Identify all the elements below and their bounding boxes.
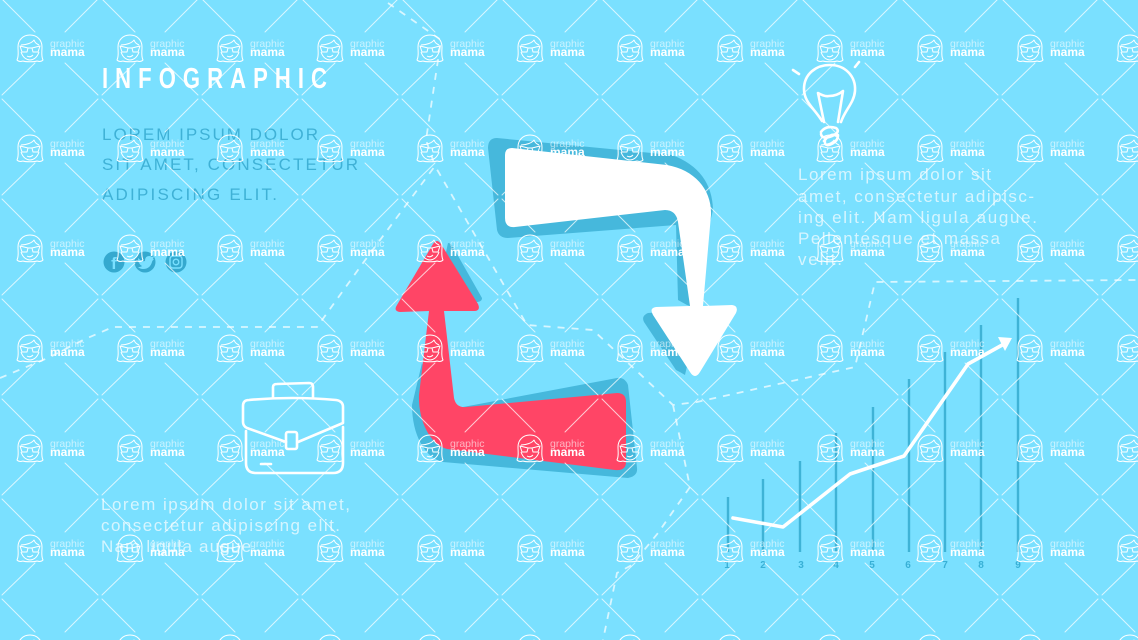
watermark grid: mama	[250, 445, 285, 459]
watermark grid: mama	[750, 45, 785, 59]
watermark grid: mama	[1050, 45, 1085, 59]
watermark grid: graphic	[450, 538, 484, 550]
watermark grid: mama	[650, 445, 685, 459]
text block: bulb caption: ing elit. Nam ligula augue.	[798, 208, 1037, 227]
watermark grid: graphic	[550, 38, 584, 50]
watermark grid: graphic	[950, 138, 984, 150]
watermark grid: mama	[550, 445, 585, 459]
watermark grid: graphic	[50, 38, 84, 50]
text block: bulb caption	[798, 165, 1037, 269]
watermark grid: graphic	[850, 338, 884, 350]
watermark grid: graphic	[950, 38, 984, 50]
watermark grid: mama	[950, 445, 985, 459]
watermark grid: mama	[650, 45, 685, 59]
watermark grid: graphic	[350, 238, 384, 250]
watermark grid: graphic	[950, 238, 984, 250]
watermark grid: graphic	[650, 338, 684, 350]
watermark grid: graphic	[250, 438, 284, 450]
icon: facebook: f	[111, 254, 117, 273]
watermark grid: mama	[750, 545, 785, 559]
watermark grid: mama	[150, 45, 185, 59]
watermark grid: mama	[950, 545, 985, 559]
watermark grid: graphic	[550, 338, 584, 350]
watermark grid: graphic	[750, 438, 784, 450]
subtitle text block: LOREM IPSUM DOLOR	[102, 125, 318, 144]
text block: bulb caption: amet, consectetur adipisc-	[798, 187, 1034, 206]
watermark grid: mama	[50, 45, 85, 59]
watermark grid: graphic	[650, 38, 684, 50]
watermark grid: mama	[150, 545, 185, 559]
watermark grid: graphic	[150, 38, 184, 50]
watermark grid: graphic	[150, 438, 184, 450]
text block: bulb caption: velit.	[798, 250, 842, 269]
watermark grid: mama	[350, 145, 385, 159]
watermark grid: graphic	[250, 38, 284, 50]
watermark grid: mama	[850, 45, 885, 59]
icon: instagram	[166, 252, 186, 272]
watermark grid: graphic	[250, 338, 284, 350]
text block: bulb caption: Lorem ipsum dolor sit	[798, 165, 991, 184]
watermark grid: graphic	[350, 338, 384, 350]
text block: briefcase caption: Nam ligula augue.	[101, 537, 257, 556]
watermark grid: mama	[550, 345, 585, 359]
watermark grid: mama	[650, 345, 685, 359]
watermark grid: graphic	[350, 538, 384, 550]
watermark grid: mama	[450, 45, 485, 59]
watermark grid: graphic	[350, 138, 384, 150]
watermark grid: graphic	[850, 438, 884, 450]
watermark grid: mama	[50, 345, 85, 359]
watermark grid: graphic	[550, 538, 584, 550]
watermark grid: graphic	[350, 438, 384, 450]
watermark grid: mama	[450, 545, 485, 559]
watermark grid: mama	[450, 145, 485, 159]
watermark grid: graphic	[550, 238, 584, 250]
watermark grid: graphic	[750, 538, 784, 550]
watermark grid: graphic	[250, 538, 284, 550]
watermark grid: graphic	[950, 438, 984, 450]
chart bars	[728, 298, 1018, 552]
watermark grid: mama	[150, 145, 185, 159]
icon: twitter	[134, 252, 156, 272]
watermark grid: mama	[650, 145, 685, 159]
watermark grid: graphic	[750, 138, 784, 150]
watermark grid: mama	[450, 345, 485, 359]
watermark grid: mama	[450, 445, 485, 459]
watermark grid: graphic	[750, 338, 784, 350]
watermark grid: mama	[350, 245, 385, 259]
watermark grid: graphic	[250, 238, 284, 250]
axis numbers: 9	[1015, 560, 1021, 571]
watermark grid: mama	[1050, 345, 1085, 359]
watermark grid: graphic	[450, 38, 484, 50]
watermark grid: graphic	[450, 438, 484, 450]
axis numbers: 2	[760, 560, 766, 571]
watermark grid: graphic	[950, 338, 984, 350]
watermark grid: graphic	[850, 238, 884, 250]
watermark grid: mama	[950, 145, 985, 159]
text block: briefcase caption: consectetur adipiscing elit.	[101, 516, 340, 535]
axis numbers	[724, 560, 1021, 571]
watermark grid: mama	[650, 245, 685, 259]
subtitle text block: SIT AMET, CONSECTETUR	[102, 155, 358, 174]
watermark grid: mama	[350, 345, 385, 359]
watermark grid: mama	[550, 245, 585, 259]
watermark grid: mama	[1050, 245, 1085, 259]
watermark grid: mama	[650, 545, 685, 559]
watermark grid: mama	[150, 345, 185, 359]
watermark grid: graphic	[750, 238, 784, 250]
watermark grid: graphic	[850, 538, 884, 550]
watermark grid: graphic	[150, 538, 184, 550]
watermark grid: graphic	[550, 438, 584, 450]
watermark grid: mama	[1050, 445, 1085, 459]
axis numbers: 5	[869, 560, 875, 571]
watermark grid: mama	[250, 145, 285, 159]
subtitle text block: ADIPISCING ELIT.	[102, 185, 277, 204]
watermark grid: graphic	[850, 38, 884, 50]
axis numbers: 7	[942, 560, 948, 571]
watermark grid: graphic	[450, 338, 484, 350]
watermark grid: graphic	[650, 238, 684, 250]
title: INFOGRAPHIC	[102, 63, 327, 95]
watermark grid: graphic	[850, 138, 884, 150]
arrow: white	[488, 138, 737, 376]
axis numbers: 4	[833, 560, 839, 571]
watermark grid: graphic	[1050, 438, 1084, 450]
watermark grid: mama	[50, 545, 85, 559]
watermark grid: mama	[350, 45, 385, 59]
watermark grid: graphic	[650, 138, 684, 150]
watermark grid: mama	[50, 145, 85, 159]
watermark grid: mama	[850, 245, 885, 259]
watermark grid: mama	[250, 245, 285, 259]
icon: light bulb	[793, 62, 859, 145]
subtitle text block	[102, 125, 358, 204]
arrow: red	[396, 241, 637, 478]
watermark grid: mama	[450, 245, 485, 259]
watermark grid: mama	[150, 445, 185, 459]
watermark grid: mama	[750, 345, 785, 359]
watermark grid: graphic	[1050, 138, 1084, 150]
axis numbers: 8	[978, 560, 984, 571]
watermark grid: graphic	[50, 538, 84, 550]
watermark grid: graphic	[350, 38, 384, 50]
icon: briefcase	[243, 383, 343, 473]
watermark grid: graphic	[1050, 238, 1084, 250]
watermark grid: graphic	[650, 438, 684, 450]
watermark grid: mama	[750, 245, 785, 259]
watermark grid: graphic	[750, 38, 784, 50]
axis numbers: 6	[905, 560, 911, 571]
watermark grid: mama	[550, 45, 585, 59]
watermark grid: mama	[350, 445, 385, 459]
axis numbers: 3	[798, 560, 804, 571]
watermark grid: graphic	[1050, 38, 1084, 50]
watermark grid: mama	[150, 245, 185, 259]
watermark grid: mama	[950, 45, 985, 59]
watermark grid: graphic	[250, 138, 284, 150]
watermark grid: graphic	[50, 438, 84, 450]
watermark grid: mama	[250, 545, 285, 559]
watermark grid: mama	[1050, 145, 1085, 159]
watermark grid: mama	[1050, 545, 1085, 559]
watermark grid: graphic	[1050, 338, 1084, 350]
watermark grid: mama	[850, 445, 885, 459]
watermark grid: mama	[850, 345, 885, 359]
watermark grid: graphic	[50, 238, 84, 250]
axis numbers: 1	[724, 560, 730, 571]
watermark grid: mama	[250, 45, 285, 59]
watermark grid: graphic	[950, 538, 984, 550]
watermark grid: graphic	[450, 138, 484, 150]
watermark grid: mama	[750, 445, 785, 459]
watermark grid: mama	[350, 545, 385, 559]
watermark grid: graphic	[150, 138, 184, 150]
watermark grid: graphic	[650, 538, 684, 550]
watermark grid: mama	[50, 445, 85, 459]
trend line arrow	[733, 337, 1012, 527]
watermark grid: mama	[50, 245, 85, 259]
text block: briefcase caption	[101, 495, 350, 556]
bar chart	[724, 298, 1021, 571]
watermark grid: graphic	[550, 138, 584, 150]
watermark grid: mama	[250, 345, 285, 359]
watermark grid: graphic	[1050, 538, 1084, 550]
social icons	[104, 252, 186, 273]
watermark grid: mama	[950, 345, 985, 359]
watermark grid: graphic	[150, 338, 184, 350]
watermark grid: mama	[750, 145, 785, 159]
watermark grid: mama	[950, 245, 985, 259]
watermark grid: graphic	[450, 238, 484, 250]
watermark grid: mama	[550, 545, 585, 559]
text block: briefcase caption: Lorem ipsum dolor sit amet,	[101, 495, 350, 514]
watermark grid: graphic	[50, 338, 84, 350]
watermark grid: mama	[850, 145, 885, 159]
watermark grid: mama	[550, 145, 585, 159]
watermark grid: graphic	[50, 138, 84, 150]
text block: bulb caption: Pellentesque et massa	[798, 229, 1001, 248]
watermark grid: mama	[850, 545, 885, 559]
watermark grid: graphic	[150, 238, 184, 250]
